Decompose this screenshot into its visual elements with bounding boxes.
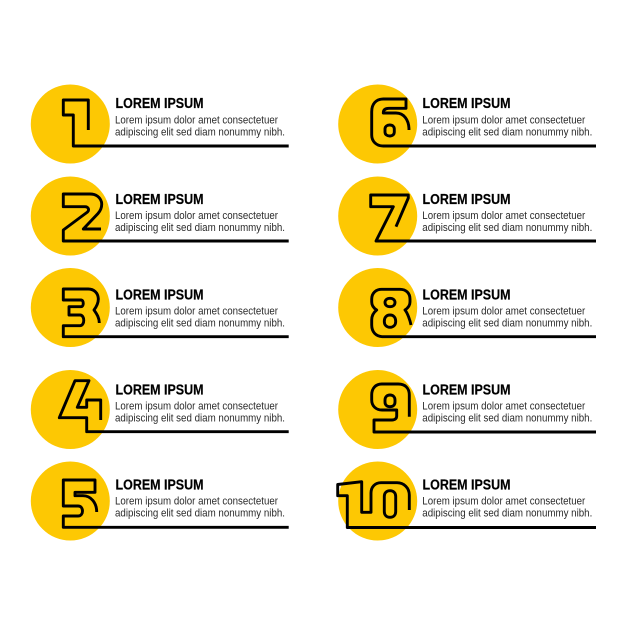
body text 1: Lorem ipsum dolor amet consectetuer [115,115,278,127]
circle 7 [338,176,417,256]
item 5 [31,462,289,540]
number 9 outline and rule [372,384,596,432]
heading 10: LOREM IPSUM [422,477,510,493]
body text 4: adipiscing elit sed diam nonummy nibh. [115,412,285,424]
heading 6: LOREM IPSUM [422,96,510,112]
heading 4: LOREM IPSUM [116,382,204,398]
body text 4: Lorem ipsum dolor amet consectetuer [115,401,278,413]
item 10 [338,462,596,540]
item 7 [338,176,596,256]
number 5 outline and rule [63,480,289,527]
heading 2: LOREM IPSUM [116,192,204,208]
body text 5: Lorem ipsum dolor amet consectetuer [115,496,278,508]
heading 9: LOREM IPSUM [422,382,510,398]
body text 5: adipiscing elit sed diam nonummy nibh. [115,507,285,519]
item 4 [31,370,289,449]
circle 5 [31,462,110,540]
body text 6: Lorem ipsum dolor amet consectetuer [422,115,586,127]
body text 8: adipiscing elit sed diam nonummy nibh. [422,317,592,329]
number 4 outline and rule [59,381,289,432]
number 6 outline and rule [372,99,596,146]
number 8 outline and rule [372,289,596,337]
number 3 outline and rule [63,289,289,337]
body text 2: adipiscing elit sed diam nonummy nibh. [115,222,285,234]
body text 8: Lorem ipsum dolor amet consectetuer [422,306,586,318]
item 9 [338,370,596,449]
item 8 [338,268,596,347]
body text 10: adipiscing elit sed diam nonummy nibh. [422,507,592,519]
body text 9: adipiscing elit sed diam nonummy nibh. [422,412,592,424]
circle 3 [31,268,110,347]
body text 10: Lorem ipsum dolor amet consectetuer [422,496,586,508]
item 1 [31,84,289,164]
number 7 outline and rule [371,195,596,241]
body text 2: Lorem ipsum dolor amet consectetuer [115,210,278,222]
body text 9: Lorem ipsum dolor amet consectetuer [422,401,586,413]
body text 6: adipiscing elit sed diam nonummy nibh. [422,126,592,138]
number 1 outline and rule [63,100,289,146]
heading 5: LOREM IPSUM [116,477,204,493]
circle 8 [338,268,417,347]
body text 7: adipiscing elit sed diam nonummy nibh. [422,222,592,234]
body text 1: adipiscing elit sed diam nonummy nibh. [115,126,285,138]
item 6 [338,84,596,164]
body text 3: adipiscing elit sed diam nonummy nibh. [115,317,285,329]
number 10 outline and rule [338,482,596,528]
heading 1: LOREM IPSUM [116,96,204,112]
circle 9 [338,370,417,449]
body text 3: Lorem ipsum dolor amet consectetuer [115,306,278,318]
item 3 [31,268,289,347]
number 2 outline and rule [63,194,289,241]
heading 8: LOREM IPSUM [422,287,510,303]
body text 7: Lorem ipsum dolor amet consectetuer [422,210,586,222]
circle 1 [31,84,110,164]
circle 2 [31,176,110,256]
circle 10 [338,462,417,540]
circle 6 [338,84,417,164]
heading 7: LOREM IPSUM [422,192,510,208]
heading 3: LOREM IPSUM [116,287,204,303]
circle 4 [31,370,110,449]
item 2 [31,176,289,256]
